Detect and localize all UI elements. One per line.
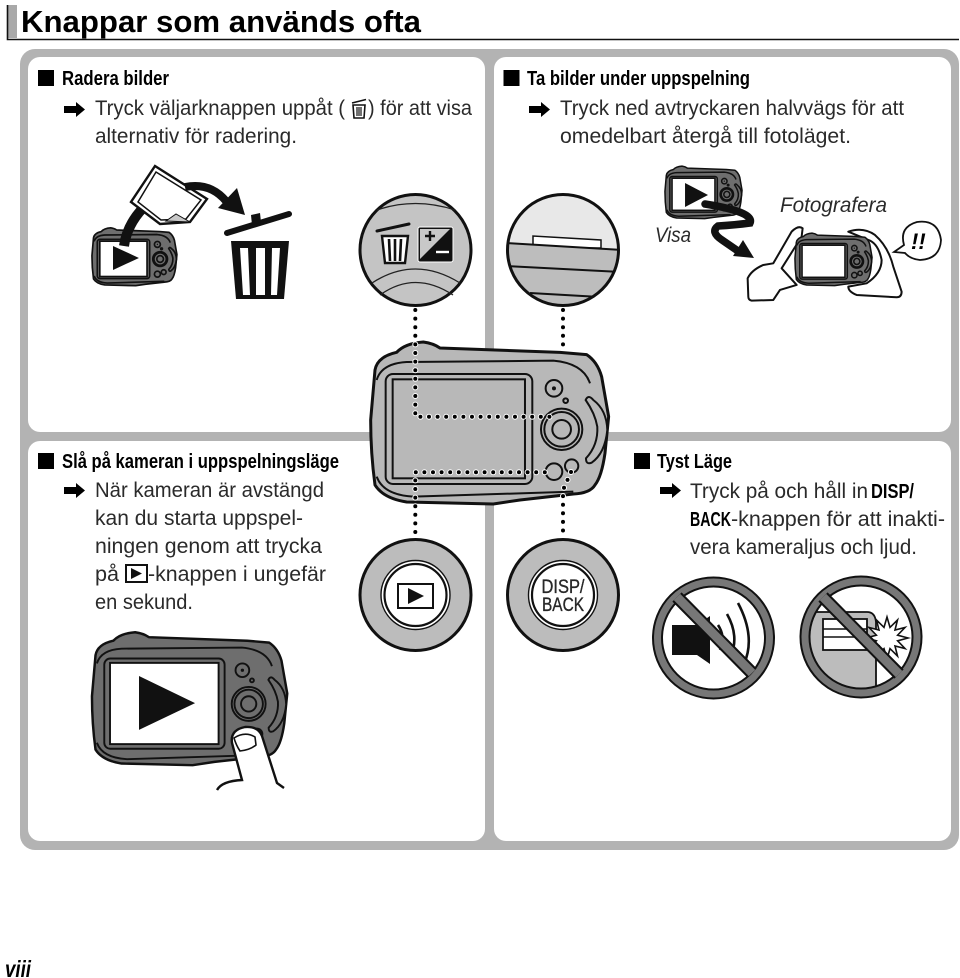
- panel: Slå på kameran i uppspelningsläge: [28, 441, 485, 841]
- text: silent mode instruction: BACK: [690, 509, 731, 531]
- icon: speech bubble: !!: [911, 229, 926, 254]
- label: Visa: Visa: [655, 224, 691, 247]
- text: delete instruction: [64, 96, 472, 148]
- text: delete instruction: alternativ för radering.: [95, 124, 297, 148]
- icon: speech bubble: [894, 222, 941, 260]
- icon: no flash: [800, 576, 922, 698]
- text: shutter instruction: [529, 96, 904, 148]
- title: Knappar som används ofta: [21, 4, 422, 39]
- text: silent mode instruction: Tryck på och håll in: [690, 479, 868, 503]
- arrow: playback to shooting: [705, 204, 754, 258]
- icon: camera in playback mode: [665, 166, 742, 219]
- text: silent mode instruction: DISP/: [871, 481, 914, 503]
- heading: Tyst Läge: Tyst Läge: [657, 451, 732, 473]
- panel: Radera bilder: [28, 57, 485, 432]
- heading: Radera bilder: Radera bilder: [62, 68, 169, 90]
- circle: playback button: [360, 540, 471, 650]
- heading: Tyst Läge: [634, 451, 732, 473]
- text: delete instruction: Tryck väljarknappen uppåt (: [95, 96, 346, 120]
- text: playback start instruction: på: [95, 562, 119, 586]
- circle: DISP/BACK button: [508, 540, 618, 650]
- title: [7, 4, 959, 40]
- icon: hands holding camera: [748, 227, 902, 301]
- text: silent mode instruction: vera kameraljus och ljud.: [690, 535, 917, 559]
- heading: Ta bilder under uppspelning: Ta bilder under uppspelning: [527, 68, 750, 90]
- text: shutter instruction: Tryck ned avtryckaren halvvägs för att: [560, 96, 904, 120]
- text: playback start instruction: När kameran är avstängd: [95, 478, 324, 502]
- text: silent mode instruction: -knappen för att inakti-: [731, 507, 945, 531]
- text: playback start instruction: -knappen i ungefär: [148, 562, 326, 586]
- text: silent mode instruction: [660, 479, 945, 559]
- dotted leader lines: [415, 310, 571, 532]
- text: playback start instruction: en sekund.: [95, 590, 193, 614]
- icon: trash can: [227, 213, 289, 299]
- text: playback start instruction: [64, 478, 326, 614]
- text: delete instruction: ) för att visa: [368, 96, 472, 120]
- panel: Ta bilder under uppspelning: [494, 57, 951, 432]
- text: playback start instruction: kan du starta uppspel-: [95, 506, 303, 530]
- circle: trash and exposure buttons: [360, 194, 471, 306]
- text: playback start instruction: ningen genom att trycka: [95, 534, 322, 558]
- central camera diagram: [371, 342, 609, 504]
- text: shutter instruction: omedelbart återgå till fotoläget.: [560, 124, 851, 148]
- panel: Tyst Läge: [494, 441, 951, 841]
- icon: photo with arrow to trash: [124, 166, 245, 246]
- icon: camera with finger pressing playback: [92, 632, 287, 790]
- circle: shutter button: [505, 192, 622, 310]
- icon: camera in shooting mode: [795, 233, 872, 286]
- icon: no sound: [653, 578, 774, 698]
- circle: DISP/BACK button: DISP/: [542, 577, 585, 598]
- heading: Slå på kameran i uppspelningsläge: Slå på kameran i uppspelningsläge: [62, 450, 339, 473]
- circle: DISP/BACK button: BACK: [542, 595, 584, 616]
- label: Fotografera: Fotografera: [780, 194, 887, 217]
- icon: playback camera: [92, 228, 177, 286]
